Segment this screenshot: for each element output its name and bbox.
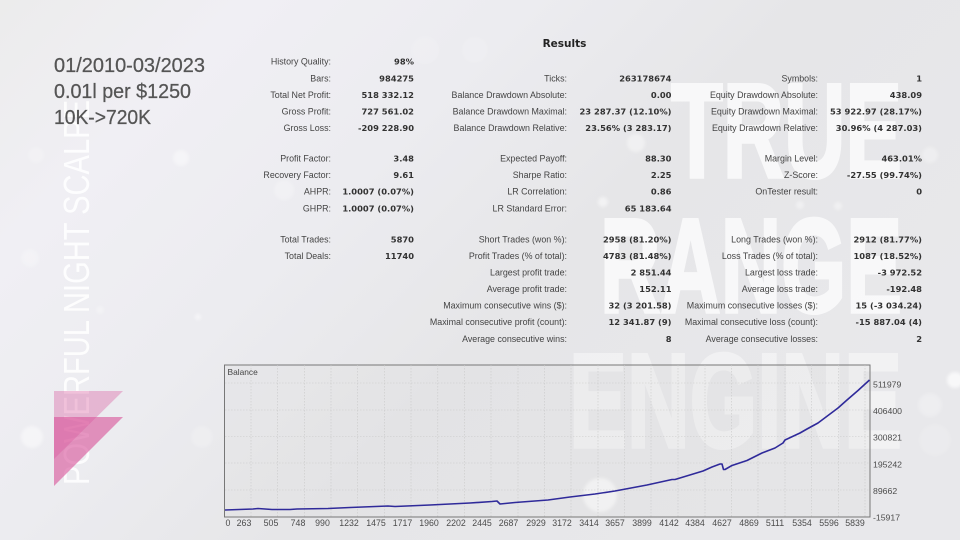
column 2: balance and profit stats: Balance Drawdown Relative:	[454, 123, 567, 133]
x axis labels: 0	[226, 518, 231, 528]
y axis labels: 195242	[873, 460, 902, 470]
column 1: general stats	[263, 56, 415, 261]
column 2: balance and profit stats: Largest profit trade:	[490, 268, 567, 278]
column 1: general stats: 98%	[394, 56, 415, 66]
column 2: balance and profit stats: Balance Drawdown Absolute:	[452, 90, 567, 100]
column 2: balance and profit stats: LR Correlation:	[507, 186, 567, 196]
column 3: equity and loss stats: -15 887.04 (4)	[855, 317, 922, 327]
column 2: balance and profit stats: 263178674	[619, 74, 672, 84]
x axis labels: 1717	[393, 518, 412, 528]
column 3: equity and loss stats: 2	[916, 334, 922, 344]
column 2: balance and profit stats: 152.11	[639, 284, 672, 294]
column 2: balance and profit stats	[430, 74, 672, 344]
column 2: balance and profit stats: 2958 (81.20%)	[603, 234, 672, 244]
column 3: equity and loss stats: Loss Trades (% of total):	[722, 251, 818, 261]
balance curve	[225, 380, 870, 510]
vertical watermark: POWERFUL NIGHT SCALPE: POWERFUL NIGHT SCALPE	[56, 100, 97, 485]
column 2: balance and profit stats: Maximum consecutive wins ($):	[443, 300, 567, 310]
column 1: general stats: Bars:	[310, 74, 331, 84]
x axis labels: 4869	[739, 518, 759, 528]
column 3: equity and loss stats: Margin Level:	[765, 154, 818, 164]
column 3: equity and loss stats: 1	[916, 74, 922, 84]
column 3: equity and loss stats: Average consecutive losses:	[706, 334, 818, 344]
results title: Results	[543, 38, 586, 50]
column 3: equity and loss stats: 463.01%	[881, 154, 923, 164]
y axis labels: 406400	[873, 406, 902, 416]
column 3: equity and loss stats: 1087 (18.52%)	[853, 251, 922, 261]
column 3: equity and loss stats: Long Trades (won %):	[731, 234, 818, 244]
column 1: general stats: 11740	[385, 251, 414, 261]
x axis labels: 5839	[845, 518, 865, 528]
x axis labels: 3172	[552, 518, 572, 528]
column 3: equity and loss stats: -3 972.52	[878, 268, 922, 278]
column 2: balance and profit stats: 23.56% (3 283.17)	[585, 123, 672, 133]
column 1: general stats: Gross Profit:	[282, 106, 331, 116]
column 3: equity and loss stats: 438.09	[890, 90, 922, 100]
column 1: general stats: 1.0007 (0.07%)	[342, 204, 414, 214]
results table	[263, 56, 923, 344]
column 1: general stats: GHPR:	[303, 204, 331, 214]
column 2: balance and profit stats: 23 287.37 (12.10%)	[580, 106, 672, 116]
x axis labels: 4142	[659, 518, 679, 528]
x axis labels: 505	[264, 518, 278, 528]
x axis labels: 5111	[766, 518, 784, 528]
y axis labels	[873, 380, 902, 522]
column 1: general stats: 518 332.12	[361, 90, 414, 100]
column 3: equity and loss stats	[685, 74, 923, 344]
column 3: equity and loss stats: Maximum consecutive losses ($):	[687, 300, 818, 310]
x axis labels: 263	[237, 518, 251, 528]
balance chart	[224, 327, 902, 528]
column 3: equity and loss stats: Equity Drawdown Absolute:	[710, 90, 818, 100]
column 1: general stats: 1.0007 (0.07%)	[342, 186, 414, 196]
grid lines	[225, 365, 870, 517]
column 1: general stats: Total Deals:	[285, 251, 331, 261]
x axis labels: 2929	[526, 518, 546, 528]
column 2: balance and profit stats: 8	[666, 334, 672, 344]
column 2: balance and profit stats: Average profit trade:	[487, 284, 567, 294]
column 3: equity and loss stats: Average loss trade:	[742, 284, 818, 294]
column 2: balance and profit stats: Short Trades (won %):	[479, 234, 567, 244]
column 3: equity and loss stats: Equity Drawdown Maximal:	[711, 106, 818, 116]
column 3: equity and loss stats: OnTester result:	[755, 186, 818, 196]
chart label: Balance	[228, 367, 258, 377]
column 1: general stats: Profit Factor:	[280, 154, 331, 164]
column 2: balance and profit stats: 12 341.87 (9)	[608, 317, 672, 327]
x axis labels: 2687	[499, 518, 518, 528]
plot area	[224, 365, 870, 517]
y axis labels: 89662	[873, 486, 897, 496]
x axis labels: 4627	[712, 518, 732, 528]
x axis labels: 1232	[339, 518, 359, 528]
x axis labels: 748	[291, 518, 305, 528]
column 2: balance and profit stats: 0.00	[651, 90, 672, 100]
x axis labels: 3657	[605, 518, 625, 528]
y axis labels: -15917	[873, 512, 900, 522]
column 2: balance and profit stats: Ticks:	[544, 74, 567, 84]
x axis labels: 1475	[366, 518, 386, 528]
column 1: general stats: -209 228.90	[358, 123, 414, 133]
column 3: equity and loss stats: 2912 (81.77%)	[853, 234, 922, 244]
x axis labels: 3414	[579, 518, 599, 528]
column 1: general stats: 984275	[379, 74, 414, 84]
x axis labels: 2445	[472, 518, 492, 528]
column 2: balance and profit stats: 0.86	[651, 186, 672, 196]
column 1: general stats: 5870	[391, 234, 414, 244]
y axis labels: 300821	[873, 432, 902, 442]
column 3: equity and loss stats: Maximal consecutive loss (count):	[685, 317, 818, 327]
x axis labels: 990	[315, 518, 330, 528]
column 3: equity and loss stats: -192.48	[886, 284, 922, 294]
column 2: balance and profit stats: 32 (3 201.58)	[608, 300, 672, 310]
column 2: balance and profit stats: 2.25	[651, 170, 672, 180]
icon: pink triangles	[54, 391, 123, 486]
heading: test period and settings: 10K->720K	[54, 107, 152, 129]
x axis labels	[226, 518, 865, 528]
column 2: balance and profit stats: Expected Payoff:	[500, 154, 567, 164]
column 2: balance and profit stats: Balance Drawdown Maximal:	[453, 106, 567, 116]
watermark title: TRUE RANGE ENGINE	[600, 57, 902, 341]
column 1: general stats: AHPR:	[304, 186, 331, 196]
column 2: balance and profit stats: LR Standard Error:	[493, 204, 567, 214]
column 3: equity and loss stats: 30.96% (4 287.03)	[836, 123, 922, 133]
column 1: general stats: 727 561.02	[361, 106, 414, 116]
x axis labels: 5596	[819, 518, 839, 528]
column 1: general stats: Total Net Profit:	[270, 90, 331, 100]
column 2: balance and profit stats: Profit Trades (% of total):	[469, 251, 567, 261]
column 2: balance and profit stats: Sharpe Ratio:	[513, 170, 567, 180]
column 2: balance and profit stats: 2 851.44	[631, 268, 672, 278]
column 3: equity and loss stats: -27.55 (99.74%)	[847, 170, 922, 180]
x axis labels: 4384	[685, 518, 705, 528]
x axis labels: 1960	[419, 518, 439, 528]
x axis labels: 3899	[632, 518, 652, 528]
column 2: balance and profit stats: 65 183.64	[625, 204, 672, 214]
column 3: equity and loss stats: Equity Drawdown Relative:	[712, 123, 818, 133]
column 3: equity and loss stats: Largest loss trade:	[745, 268, 818, 278]
column 1: general stats: 3.48	[393, 154, 414, 164]
heading: test period and settings: 0.01l per $1250	[54, 81, 191, 103]
heading: test period and settings	[54, 55, 205, 129]
column 3: equity and loss stats: 15 (-3 034.24)	[855, 300, 922, 310]
column 1: general stats: 9.61	[393, 170, 414, 180]
x axis labels: 5354	[792, 518, 812, 528]
column 1: general stats: History Quality:	[271, 56, 331, 66]
column 2: balance and profit stats: Average consecutive wins:	[462, 334, 567, 344]
column 3: equity and loss stats: Symbols:	[782, 74, 818, 84]
y axis labels: 511979	[873, 380, 902, 390]
column 1: general stats: Gross Loss:	[284, 123, 331, 133]
column 2: balance and profit stats: 88.30	[645, 154, 672, 164]
column 2: balance and profit stats: 4783 (81.48%)	[603, 251, 672, 261]
heading: test period and settings: 01/2010-03/2023	[54, 55, 205, 77]
column 2: balance and profit stats: Maximal consecutive profit (count):	[430, 317, 567, 327]
column 1: general stats: Total Trades:	[280, 234, 331, 244]
column 3: equity and loss stats: Z-Score:	[784, 170, 818, 180]
column 3: equity and loss stats: 0	[916, 186, 922, 196]
x axis labels: 2202	[446, 518, 466, 528]
column 3: equity and loss stats: 53 922.97 (28.17%)	[830, 106, 922, 116]
column 1: general stats: Recovery Factor:	[263, 170, 331, 180]
